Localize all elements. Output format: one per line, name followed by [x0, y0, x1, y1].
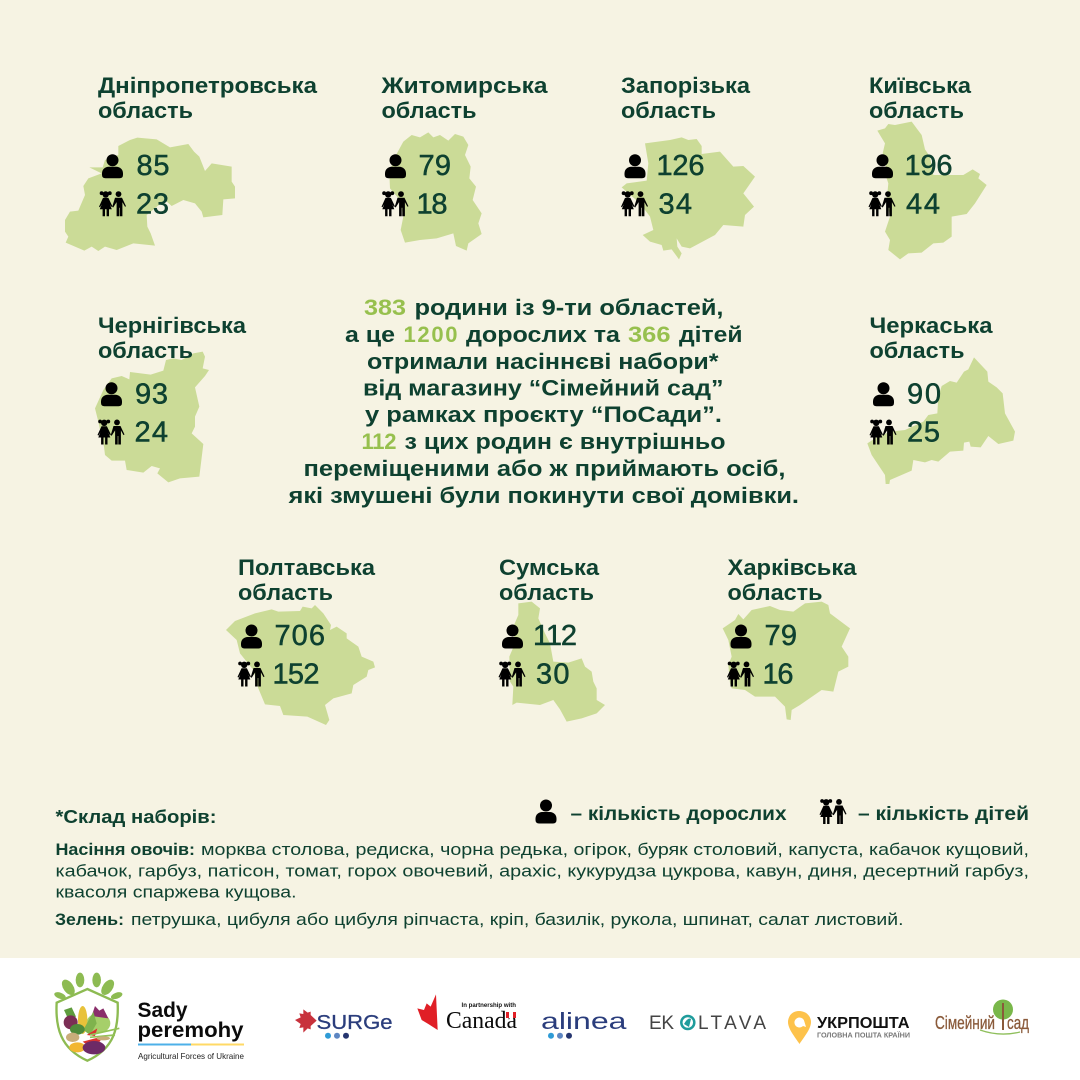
heading	[869, 73, 972, 123]
panel: Чернігівська область	[95, 313, 247, 482]
logo: Ukrposhta: ГОЛОВНА ПОШТА КРАЇНИ	[817, 1032, 910, 1040]
icon: children	[621, 191, 648, 216]
logo: Simeiny Sad	[935, 1000, 1029, 1034]
map: Черкаська	[867, 357, 1015, 484]
central summary text: які змушені були покинути свої домівки.	[287, 483, 799, 508]
central summary text: 383	[364, 295, 406, 320]
heading	[98, 313, 247, 363]
map: Сумська	[509, 602, 605, 722]
adults count: 79	[764, 620, 797, 652]
heading	[380, 73, 548, 123]
heading: область	[238, 580, 333, 605]
vegetable seeds list: морква столова, редиска, чорна редька, огірок, буряк столовий, капуста, кабачок кущовий,	[201, 841, 1029, 859]
central summary text: переміщеними або ж приймають осіб,	[304, 456, 786, 481]
children count: 16	[762, 658, 794, 690]
heading: Чернігівська	[98, 313, 247, 338]
heading	[238, 555, 376, 605]
heading: область	[869, 98, 964, 123]
map: Харківська	[723, 602, 850, 720]
children count: 152	[272, 658, 320, 690]
central summary text: дорослих та	[466, 322, 621, 347]
heading: Житомирська	[380, 73, 548, 98]
adults count: 90	[907, 378, 941, 410]
logo: Ukrposhta: УКРПОШТА	[817, 1015, 910, 1032]
logo: SURGe: SURGe	[316, 1012, 392, 1034]
central summary text	[287, 295, 799, 508]
panel: Полтавська область	[226, 555, 376, 725]
legend label: children: – кількість дітей	[858, 804, 1029, 825]
central summary text: отримали насіннєві набори*	[367, 349, 719, 374]
adults count: 79	[418, 150, 451, 182]
heading: область	[870, 338, 964, 363]
central summary text: дітей	[679, 322, 742, 347]
icon: adults	[872, 154, 893, 178]
icon: children	[238, 662, 264, 686]
footnote heading: *Склад наборів:	[56, 806, 216, 827]
icon: adults	[241, 624, 262, 648]
panel: Сумська область	[498, 555, 605, 722]
logo: Ekoltava	[649, 1013, 766, 1034]
legend label: adults: – кількість дорослих	[570, 804, 787, 825]
legend icon: adults	[536, 800, 556, 824]
panel: Житомирська область	[380, 73, 548, 251]
children count: 30	[536, 658, 570, 690]
logo: Simeiny Sad: Сімейний	[935, 1013, 995, 1033]
logo: SURGe	[295, 1009, 392, 1039]
children count: 24	[134, 417, 168, 449]
heading	[621, 73, 751, 123]
icon: adults	[873, 382, 894, 406]
map: Київська	[877, 122, 987, 259]
heading: Черкаська	[870, 313, 993, 338]
map: Чернігівська	[95, 352, 209, 482]
adults count: 126	[656, 150, 704, 182]
central summary text: від магазину “Сімейний сад”	[363, 376, 724, 400]
greens list: петрушка, цибуля або цибуля ріпчаста, кріп, базилік, рукола, шпинат, салат листовий.	[131, 911, 904, 929]
heading: область	[728, 580, 822, 605]
vegetable seeds list: Насіння овочів:	[56, 841, 195, 859]
heading: область	[98, 338, 193, 363]
panel: Запорізька область	[621, 73, 755, 259]
adults count: 85	[136, 150, 170, 182]
icon: children	[98, 420, 124, 444]
wordmark: Sady	[138, 999, 188, 1022]
heading: Дніпропетровська	[98, 73, 318, 98]
heading: область	[382, 98, 476, 123]
heading: Харківська	[728, 555, 857, 580]
children count: 44	[906, 188, 940, 220]
panel: Київська область	[868, 73, 987, 259]
logo: alinea	[541, 1008, 627, 1039]
central summary text: у рамках проєкту “ПоСади”.	[365, 402, 722, 427]
icon: children	[727, 662, 754, 686]
logo: alinea: alinea	[541, 1008, 627, 1034]
vegetable seeds list: кабачок, гарбуз, патісон, томат, горох овочевий, арахіс, кукурудза цукрова, кавун, диня, десертний гарбуз,	[56, 862, 1029, 880]
logo: Simeiny Sad: сад	[1007, 1013, 1029, 1033]
logo: Ekoltava: LTAVA	[698, 1013, 766, 1034]
logo: Canada partnership: Canada	[446, 1008, 517, 1034]
heading: область	[499, 580, 594, 605]
icon: adults	[385, 154, 406, 178]
legend icon: children	[820, 799, 846, 824]
icon: adults	[102, 154, 123, 178]
central summary text: а це	[345, 322, 395, 347]
heading	[98, 73, 318, 123]
logo: Canada partnership: In partnership with	[462, 1003, 516, 1009]
logo: Ekoltava: EK	[649, 1013, 674, 1034]
children count: 25	[907, 417, 940, 449]
central summary text: з цих родин є внутрішньо	[404, 429, 726, 454]
central summary text: 112	[362, 429, 396, 454]
panel: Харківська область	[723, 555, 857, 720]
adults count: 93	[135, 378, 168, 410]
heading: Сумська	[499, 555, 600, 580]
heading	[870, 313, 993, 363]
central summary text: 366	[628, 322, 670, 347]
heading: Полтавська	[238, 555, 376, 580]
footnote: kit contents	[55, 806, 1029, 929]
central summary text: родини із 9-ти областей,	[414, 295, 724, 320]
adults count: 112	[533, 620, 577, 652]
logo: Sady peremohy: Agricultural Forces of Ukraine	[138, 1051, 244, 1061]
map: Житомирська	[389, 132, 482, 251]
map: Полтавська	[226, 605, 375, 725]
map: Дніпропетровська	[65, 138, 235, 251]
icon: adults	[502, 624, 523, 648]
icon: children	[498, 662, 526, 686]
icon: children	[868, 191, 896, 216]
logo: Sady peremohy: peremohy	[138, 1019, 244, 1042]
heading: Київська	[869, 73, 972, 98]
heading	[728, 555, 857, 605]
map: Запорізька	[622, 137, 755, 259]
logo: Ukrposhta	[788, 1011, 910, 1044]
vegetable seeds list: квасоля спаржева кущова.	[56, 884, 296, 902]
icon: adults	[624, 154, 646, 178]
panel: Дніпропетровська область	[65, 73, 318, 251]
heading: область	[98, 98, 193, 123]
icon: children	[99, 191, 126, 216]
vegetable seeds list	[56, 841, 1029, 902]
heading: область	[621, 98, 716, 123]
icon: children	[382, 191, 408, 216]
icon: adults	[101, 382, 122, 406]
heading: Запорізька	[621, 73, 751, 98]
logo: Canada partnership	[417, 994, 517, 1034]
logo: Sady peremohy	[53, 973, 244, 1061]
greens list: Зелень:	[55, 911, 124, 929]
children count: 34	[658, 188, 692, 220]
icon: children	[870, 420, 896, 444]
adults count: 196	[904, 150, 952, 182]
panel: Черкаська область	[867, 313, 1015, 484]
children count: 23	[136, 188, 169, 220]
footer band	[0, 958, 1080, 1080]
adults count: 706	[274, 620, 325, 652]
heading	[499, 555, 600, 605]
children count: 18	[416, 188, 448, 220]
central summary text: 1200	[404, 322, 458, 347]
legend	[536, 799, 1029, 825]
icon: shield with vegetables	[53, 973, 123, 1061]
icon: adults	[730, 624, 752, 648]
